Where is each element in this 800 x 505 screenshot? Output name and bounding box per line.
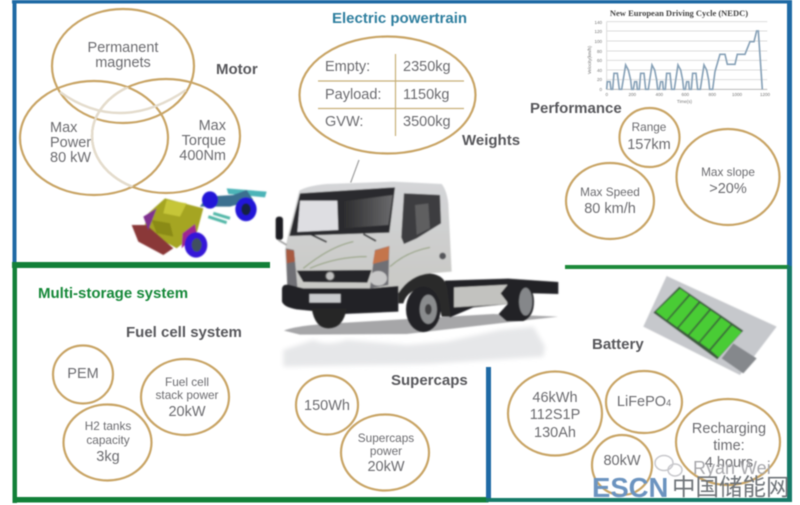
wipers [310, 234, 376, 242]
bubble: range: Range [632, 120, 667, 134]
panel: multi-storage frame [12, 262, 789, 503]
bubble: max slope: >20% [709, 181, 747, 197]
weights table ellipse: 1150kg [403, 87, 450, 103]
chart axis labels: 0 [599, 87, 602, 92]
chassis rail [445, 279, 558, 317]
right headlight [370, 246, 389, 288]
side decal [303, 242, 430, 268]
bumper [282, 285, 398, 314]
bubble: recharging time: Recharging [692, 421, 766, 437]
panel: battery frame [486, 266, 792, 502]
chart axis labels: 600 [681, 92, 689, 97]
bubble: supercaps power: 20kW [367, 459, 405, 475]
bubble: supercaps power [341, 414, 429, 490]
chart axis labels: 140 [594, 20, 602, 25]
icon: powertrain chassis [132, 188, 267, 258]
bubble: recharging time [676, 399, 780, 485]
bubble: H2 tanks capacity: 3kg [96, 449, 120, 465]
motor venn diagram: Torque [182, 133, 226, 149]
windscreen [289, 187, 395, 236]
bubble: range [620, 108, 680, 167]
motor venn diagram [20, 9, 240, 195]
bubble: H2 tanks capacity [64, 404, 152, 480]
bubble: fuel cell stack power [141, 359, 229, 435]
chart: NEDC driving cycle [587, 8, 770, 104]
chart axis labels: 0 [605, 92, 608, 97]
chart axis labels: 20 [597, 77, 602, 82]
bubble: supercaps power: power [370, 444, 402, 458]
icon: battery pack [643, 276, 777, 375]
chart axis labels: 1000 [732, 92, 742, 97]
chart axis labels: 60 [597, 58, 602, 63]
chart axis labels: 1200 [760, 92, 770, 97]
bubble: H2 tanks capacity: H2 tanks [85, 419, 131, 433]
chart axis labels: Velocity(km/h) [587, 45, 592, 74]
bubble: LiFePO4: LiFePO4 [617, 394, 671, 410]
icon: chat watermark [655, 456, 682, 476]
heading: battery: Battery [592, 336, 644, 353]
wheel arch [398, 273, 451, 317]
truck ground shadow [284, 314, 558, 335]
bubble: fuel cell stack power: 20kW [168, 404, 206, 420]
bubble: capacity: 130Ah [534, 425, 576, 441]
side window [401, 193, 441, 244]
bubble: max speed [566, 163, 654, 239]
bubble: 80kW [592, 435, 652, 495]
front left wheel [312, 308, 347, 328]
bubble: capacity: 112S1P [530, 407, 580, 423]
fuel flap [439, 253, 446, 259]
mirror [276, 217, 287, 245]
title: electric powertrain: Electric powertrain [332, 10, 467, 27]
bubble: recharging time: 4 hours [705, 455, 753, 471]
chart axis labels [587, 20, 770, 104]
bubble: max slope [676, 129, 780, 225]
bubble: LiFePO4 [606, 371, 682, 433]
motor venn diagram: Power [50, 135, 91, 151]
motor venn diagram: 400Nm [179, 148, 226, 164]
watermark: ESCN logo [592, 472, 790, 503]
weights table ellipse: 2350kg [403, 59, 451, 75]
bubble: PEM [53, 346, 113, 404]
motor venn diagram: Max [50, 120, 78, 136]
bubble: 80kW: 80kW [603, 453, 641, 469]
watermark: account name: Ryan Wei [693, 458, 771, 478]
left headlight [286, 248, 297, 287]
number plate [309, 294, 341, 303]
motor venn diagram: Max [199, 118, 227, 134]
bubble: max slope: Max slope [701, 165, 755, 179]
fuel tank [454, 285, 507, 307]
weights table ellipse: 3500kg [403, 114, 451, 130]
motor venn diagram: Permanent [88, 40, 158, 56]
grille [297, 270, 372, 283]
heading: weights: Weights [462, 132, 520, 149]
chart axis labels: Time(s) [677, 99, 692, 104]
chart axis labels: 40 [597, 68, 602, 73]
truck aerial [351, 160, 359, 183]
bubble: max speed: Max Speed [580, 185, 640, 199]
chart axis labels: 400 [655, 92, 663, 97]
bubble: capacity [508, 372, 602, 456]
rear wheel [499, 283, 534, 321]
chart axis labels: 200 [628, 92, 636, 97]
bubble: recharging time: time: [713, 438, 745, 454]
motor venn diagram: magnets [95, 55, 151, 71]
bubble: fuel cell stack power: stack power [156, 388, 219, 402]
bubble: 150Wh: 150Wh [304, 398, 350, 414]
chart title: New European Driving Cycle (NEDC) [610, 8, 748, 18]
bubble: H2 tanks capacity: capacity [86, 433, 130, 447]
front right wheel [406, 287, 441, 332]
heading: motor: Motor [216, 61, 258, 78]
cab [285, 182, 452, 293]
chart axis labels: 120 [594, 29, 602, 34]
bubble: PEM: PEM [67, 366, 99, 382]
heading: fuel cell system: Fuel cell system [126, 324, 242, 341]
truck illustration [276, 160, 558, 367]
chart axis labels: 100 [594, 39, 602, 44]
chart axis labels: 800 [708, 92, 716, 97]
heading: multi-storage system: Multi-storage system [38, 285, 188, 302]
bubble: fuel cell stack power: Fuel cell [165, 375, 209, 389]
heading: performance: Performance [530, 100, 622, 117]
heading: supercaps: Supercaps [391, 372, 468, 389]
bubble: 150Wh [296, 376, 358, 434]
bubble: supercaps power: Supercaps [358, 431, 414, 445]
weights table ellipse: GVW: [325, 114, 363, 130]
motor venn diagram: 80 kW [50, 150, 91, 166]
bubble: max speed: 80 km/h [584, 201, 636, 217]
watermark: ESCN logo: 中国储能网 [672, 474, 790, 500]
weights table ellipse: Payload: [325, 87, 381, 103]
bubble: range: 157km [627, 137, 671, 153]
watermark: ESCN logo: ESCN [592, 472, 668, 503]
bubble: capacity: 46kWh [532, 390, 578, 406]
truck reflection [283, 327, 545, 367]
truck body [276, 182, 558, 332]
weights table ellipse [300, 36, 476, 154]
panel: electric powertrain frame [12, 0, 792, 266]
weights table ellipse: Empty: [325, 59, 370, 75]
chart axis labels: 80 [597, 49, 602, 54]
